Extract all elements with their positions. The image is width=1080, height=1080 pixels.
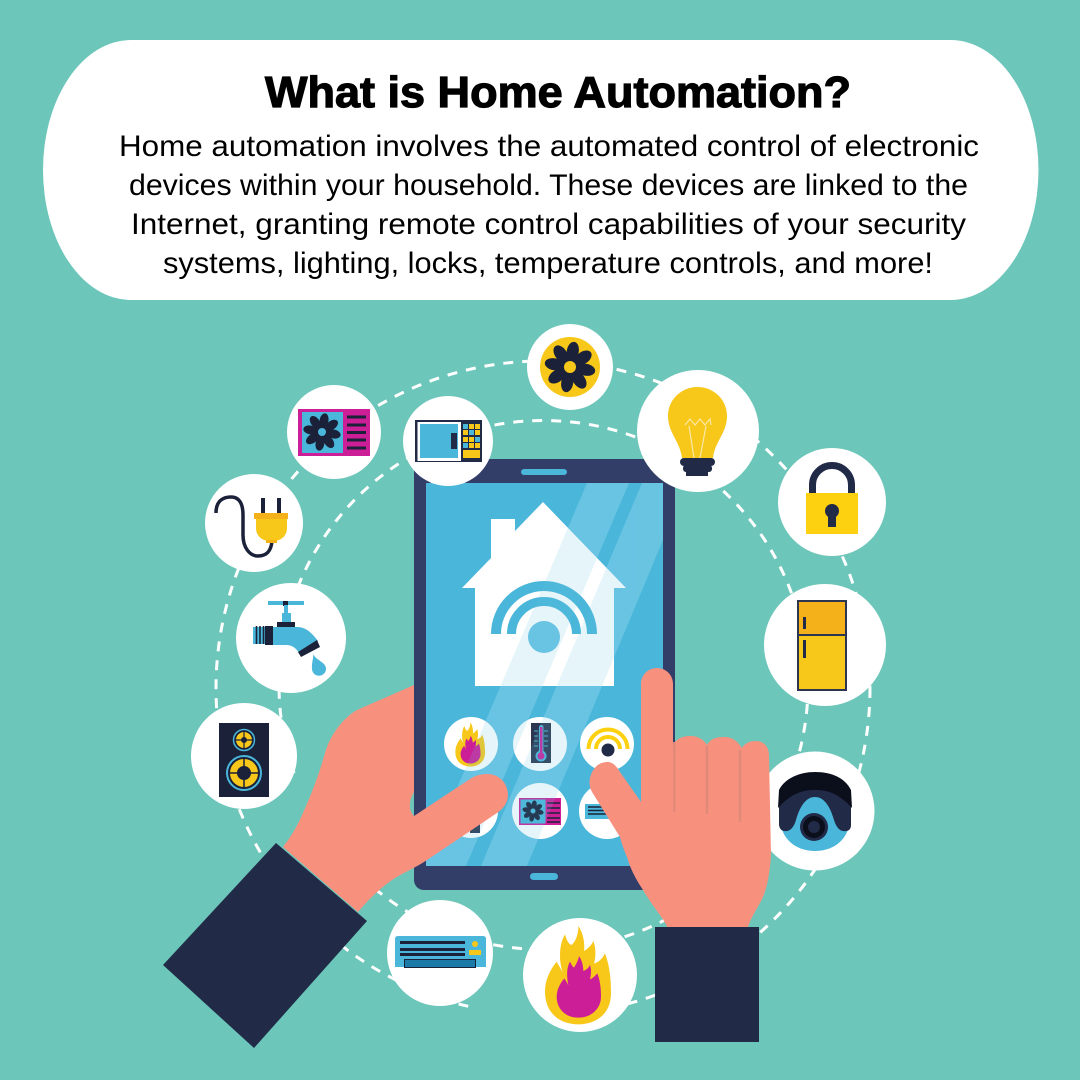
app icon: thermometer [513,717,567,771]
glass reflection overlay [426,483,663,866]
speaker slot [521,469,567,475]
description text: devices within your household. These devices are linked to the [129,169,968,202]
icon: faucet [236,583,346,693]
icon: security camera [756,752,874,870]
house icon [462,502,626,686]
icon: padlock [778,448,886,556]
icon: plug [205,474,303,572]
description text: Home automation involves the automated control of electronic [119,130,979,163]
finger creases [674,742,740,822]
icon: ventilation unit [287,385,381,479]
header panel [43,40,1038,300]
icon: flame [523,918,637,1032]
screen glare bands [426,483,663,866]
icon: fridge [764,584,886,706]
tablet [414,459,675,890]
home button [530,873,558,880]
wifi arcs [496,586,592,634]
app icon: air conditioner [579,783,635,839]
tablet body [414,459,675,890]
right hand [590,668,771,1042]
description text: Internet, granting remote control capabilities of your security [131,208,966,241]
title: What is Home Automation? [265,68,851,117]
icon: fan [527,324,613,410]
wifi centre dot [528,621,560,653]
right cuff [655,927,759,1042]
header pill [43,40,1038,300]
left hand palm and thumb [283,685,508,912]
left sleeve [163,843,367,1048]
icon: microwave [403,396,493,486]
description text: systems, lighting, locks, temperature controls, and more! [163,247,933,280]
icon: speaker [191,703,297,809]
app icon: flame [444,717,498,771]
icon: light bulb [637,370,759,492]
tablet screen [426,483,663,866]
icon: air conditioner [387,900,493,1006]
description text [119,130,979,280]
right hand palm and fingers [590,668,771,927]
dashed connection rings [216,361,870,1015]
app icon: microwave partly hidden [444,784,498,838]
left hand [163,685,508,1048]
app icon: ventilation fan [512,783,568,839]
app icon: wifi [580,717,634,771]
